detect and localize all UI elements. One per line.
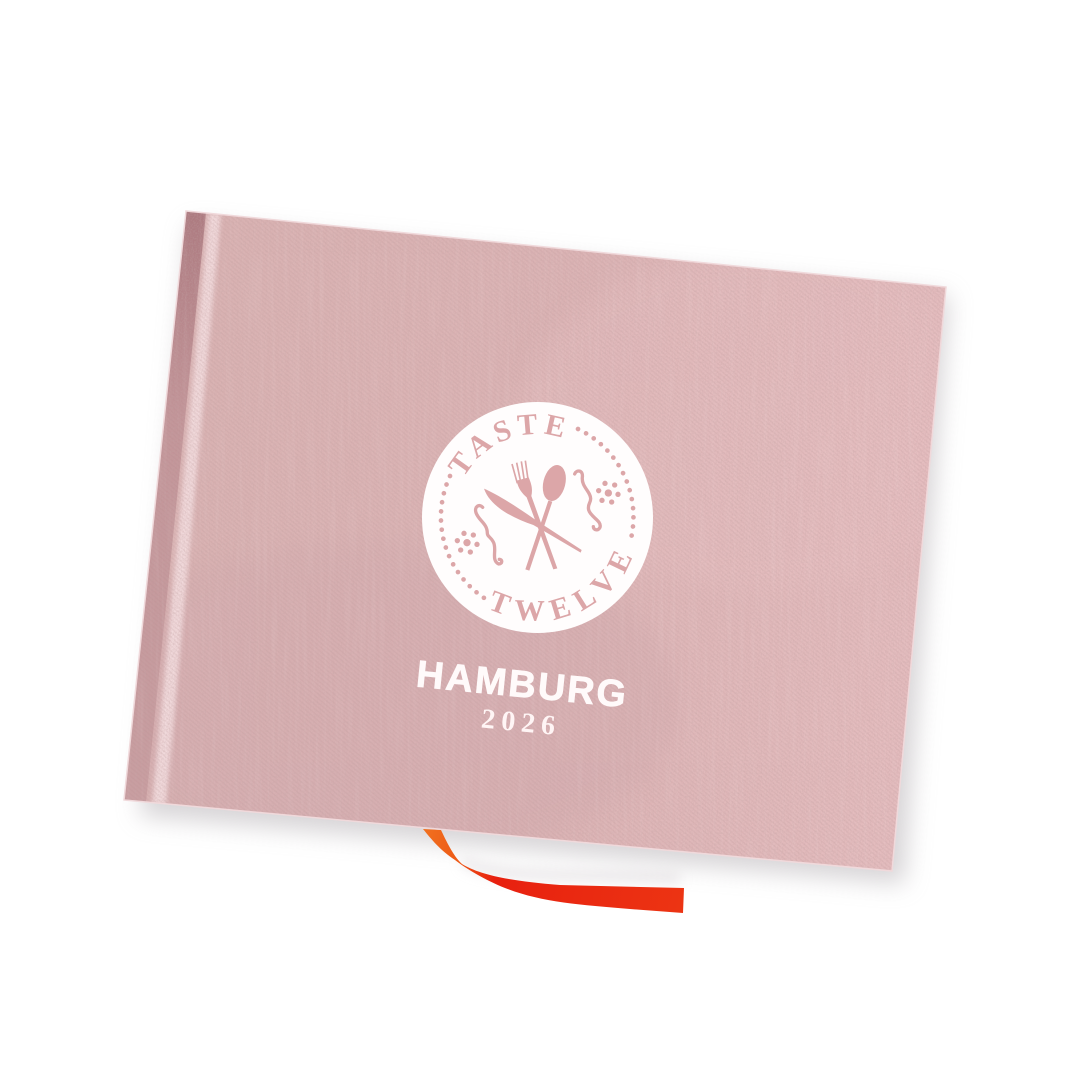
dotted ring left — [441, 476, 487, 600]
book cover — [123, 210, 947, 872]
cover shading — [224, 218, 757, 858]
white circle — [422, 402, 653, 633]
spine groove dark band — [124, 211, 206, 802]
curved text: TASTE: TASTE — [447, 414, 564, 474]
ornament right — [575, 471, 621, 530]
shadow under the book — [140, 225, 949, 884]
book cover photo scene — [123, 210, 958, 913]
curved text: TWELVE: TWELVE — [491, 551, 632, 621]
linen weave texture — [110, 200, 960, 880]
logo badge — [422, 402, 653, 633]
cloth cover — [124, 211, 946, 871]
ribbon strip — [423, 829, 684, 913]
cover edge highlight — [124, 211, 946, 871]
spine hinge highlight — [152, 213, 221, 805]
ribbon shadow — [462, 856, 680, 884]
year: 2026: 2026 — [480, 704, 563, 742]
dotted ring right — [578, 429, 633, 540]
ornament left — [455, 506, 502, 564]
icon: fork — [512, 461, 557, 569]
icon: knife — [484, 489, 582, 553]
icon: spoon — [525, 463, 569, 571]
ribbon bookmark — [423, 829, 684, 913]
heading: HAMBURG: HAMBURG — [414, 654, 630, 716]
